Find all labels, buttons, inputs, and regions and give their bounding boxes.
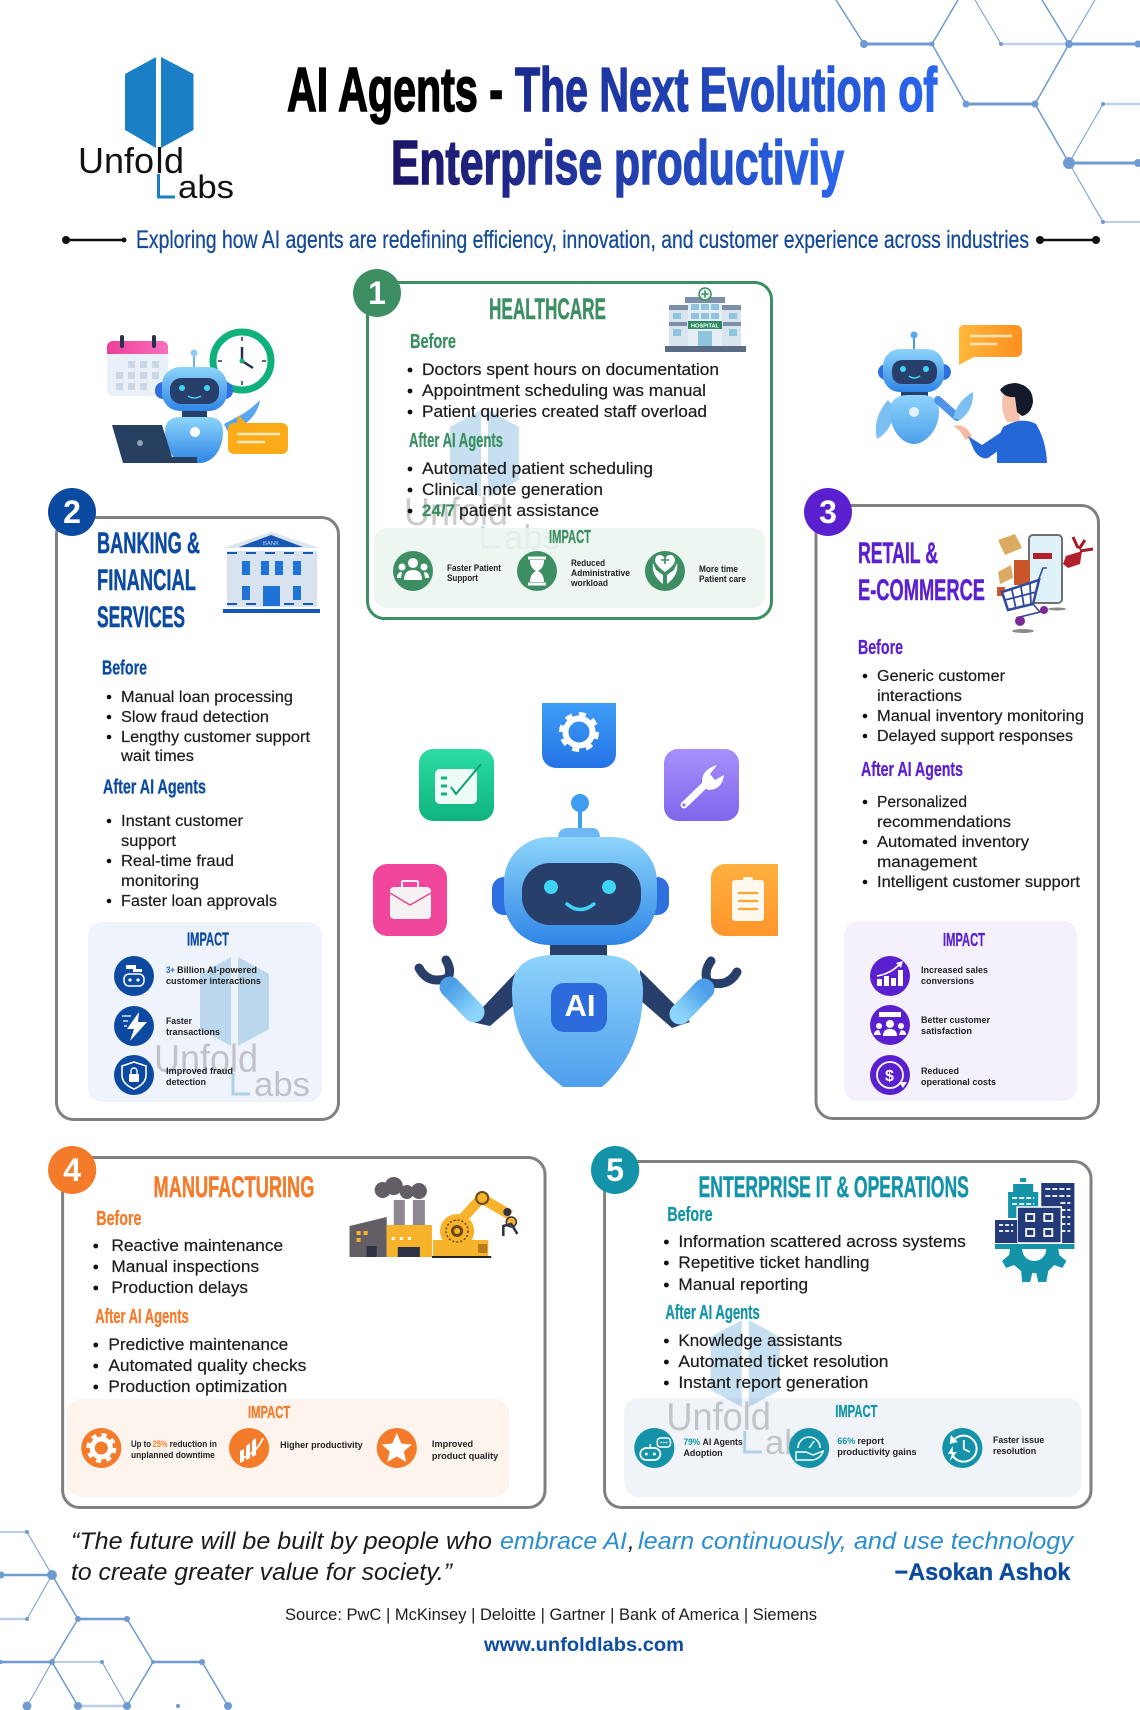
hexagon network decoration: bottom left bbox=[0, 1530, 232, 1710]
icon: orange gear bbox=[81, 1428, 121, 1468]
icon: buildings on gear bbox=[995, 1178, 1074, 1282]
impact text: billion interactions: Billion AI-powered bbox=[177, 965, 257, 976]
after list: Automated inventory bbox=[877, 834, 1029, 851]
icon: bot chat bbox=[634, 1428, 674, 1468]
impact panel: enterprise: IMPACT bbox=[835, 1401, 877, 1421]
badge 3: 3 bbox=[819, 494, 837, 530]
watermark: healthcare: Unfold bbox=[404, 491, 508, 534]
heading: healthcare: HEALTHCARE bbox=[489, 293, 606, 326]
after heading: After AI Agents bbox=[665, 1301, 760, 1324]
badge 4 bbox=[48, 1146, 96, 1194]
badge 2 bbox=[48, 488, 96, 536]
watermark: banking bbox=[154, 957, 310, 1104]
before list: Generic customer bbox=[877, 668, 1005, 685]
before list: wait times bbox=[120, 748, 194, 765]
impact text: improved quality: product quality bbox=[432, 1451, 499, 1462]
after list bbox=[93, 1335, 306, 1396]
badge 3 bbox=[804, 488, 852, 536]
impact text: faster transactions bbox=[166, 1016, 220, 1038]
quote attribution: −Asokan Ashok bbox=[894, 1559, 1071, 1586]
impact text: adoption: AI Agents bbox=[703, 1437, 743, 1448]
impact text: faster transactions: Faster bbox=[166, 1016, 192, 1027]
after list: Automated patient scheduling bbox=[422, 459, 653, 478]
impact text: productivity gains: productivity gains bbox=[837, 1447, 917, 1458]
title: AI Agents - bbox=[287, 56, 503, 125]
watermark: banking: abs bbox=[254, 1066, 310, 1104]
after list: Intelligent customer support bbox=[877, 874, 1081, 891]
impact text: faster patient support bbox=[447, 563, 502, 584]
before list bbox=[107, 689, 311, 765]
logo: Unfold Labs: abs bbox=[178, 169, 234, 205]
after list: Automated ticket resolution bbox=[678, 1352, 888, 1371]
after list: Automated quality checks bbox=[108, 1356, 306, 1375]
impact text: improved fraud detection bbox=[166, 1066, 233, 1088]
icon: satisfied customers bbox=[870, 1005, 910, 1045]
impact text: faster resolution: resolution bbox=[993, 1446, 1036, 1457]
heading: retail: RETAIL & bbox=[858, 537, 938, 570]
icon: shopping cart and phone bbox=[997, 534, 1093, 633]
panel: 1 healthcare bbox=[353, 269, 772, 618]
impact text: operational costs: operational costs bbox=[921, 1077, 996, 1088]
icon: hospital: HOSPITAL bbox=[691, 324, 720, 330]
icon: people bbox=[393, 551, 433, 591]
impact text: faster resolution bbox=[993, 1435, 1045, 1457]
title bbox=[287, 56, 937, 198]
before heading: Before bbox=[410, 330, 456, 353]
before list: Doctors spent hours on documentation bbox=[422, 360, 719, 379]
badge 5 bbox=[591, 1146, 639, 1194]
impact text: adoption: Adoption bbox=[683, 1448, 723, 1459]
impact text: productivity gains: report bbox=[857, 1436, 885, 1447]
icon: bank: BANK bbox=[263, 541, 279, 547]
impact panel: retail bbox=[844, 921, 1077, 1101]
impact text: more patient time bbox=[699, 564, 746, 585]
badge 5: 5 bbox=[606, 1152, 624, 1188]
icon: hourglass bbox=[517, 551, 557, 591]
after list: Personalized bbox=[877, 794, 967, 811]
title: The Next Evolution of bbox=[515, 56, 937, 125]
badge 1: 1 bbox=[368, 275, 386, 311]
logo: Unfold Labs: l bbox=[156, 140, 164, 181]
impact text: billion interactions bbox=[166, 965, 261, 987]
after list bbox=[107, 813, 277, 910]
after list bbox=[863, 794, 1081, 891]
impact text: reduced downtime bbox=[131, 1439, 217, 1461]
impact text: higher productivity: Higher productivity bbox=[280, 1440, 363, 1451]
before list: Patient queries created staff overload bbox=[422, 402, 707, 421]
impact panel: enterprise bbox=[624, 1398, 1081, 1497]
watermark: healthcare bbox=[404, 410, 560, 557]
icon: shield lock bbox=[114, 1055, 154, 1095]
before list bbox=[408, 360, 719, 421]
before list: Manual reporting bbox=[678, 1275, 808, 1294]
icon: lightning bbox=[114, 1006, 154, 1046]
watermark: enterprise: abs bbox=[765, 1424, 821, 1462]
after list: Real-time fraud bbox=[121, 853, 234, 870]
impact text: reduced downtime: reduction in bbox=[170, 1439, 217, 1450]
panel: 2 banking and financial services bbox=[48, 488, 338, 1120]
impact text: reduced workload bbox=[570, 558, 630, 589]
after heading: After AI Agents bbox=[103, 776, 206, 798]
icon: hospital bbox=[665, 288, 746, 352]
impact text: customer satisfaction bbox=[921, 1015, 990, 1037]
impact text: reduced workload: workload bbox=[570, 578, 608, 589]
badge 2: 2 bbox=[63, 494, 81, 530]
impact panel: healthcare: IMPACT bbox=[549, 527, 591, 547]
after list: patient assistance bbox=[459, 501, 599, 520]
before list: Manual inspections bbox=[111, 1257, 259, 1276]
icon: reduced cost: $ bbox=[885, 1068, 894, 1085]
before list: Repetitive ticket handling bbox=[678, 1253, 869, 1272]
after list: monitoring bbox=[121, 873, 199, 890]
after list: support bbox=[121, 833, 177, 850]
quote: embrace AI bbox=[500, 1528, 627, 1555]
icon tile: gear bbox=[542, 703, 616, 768]
icon tile: wrench bbox=[664, 749, 739, 821]
before list: Delayed support responses bbox=[877, 728, 1073, 745]
before heading: Before bbox=[102, 656, 147, 680]
icon: star bbox=[377, 1428, 417, 1468]
icon: fast history clock bbox=[942, 1428, 982, 1468]
impact text: operational costs: Reduced bbox=[921, 1066, 959, 1077]
robot body with AI badge bbox=[512, 945, 643, 1087]
impact panel: manufacturing bbox=[67, 1399, 509, 1497]
robot head bbox=[492, 794, 669, 945]
after list: Instant customer bbox=[121, 813, 243, 830]
icon: reduced cost bbox=[870, 1055, 910, 1095]
quote: to create greater value for society.” bbox=[71, 1559, 453, 1586]
panel: 5 enterprise IT and operations bbox=[591, 1146, 1091, 1508]
icon: chatbot bbox=[114, 956, 154, 996]
hexagon network decoration: top right bbox=[836, 0, 1140, 224]
impact text: operational costs bbox=[921, 1066, 996, 1088]
before list: interactions bbox=[877, 688, 962, 705]
watermark: enterprise: Unfold bbox=[666, 1396, 771, 1439]
impact panel: manufacturing: IMPACT bbox=[248, 1402, 290, 1422]
before heading: Before bbox=[858, 636, 903, 659]
impact panel: banking bbox=[88, 922, 322, 1104]
icon tile: briefcase bbox=[373, 864, 447, 936]
after heading: After AI Agents bbox=[861, 758, 963, 781]
after list: Knowledge assistants bbox=[678, 1331, 842, 1350]
impact text: customer satisfaction: satisfaction bbox=[921, 1026, 972, 1037]
impact text: faster patient support: Support bbox=[447, 573, 479, 584]
before list: Manual loan processing bbox=[121, 689, 293, 706]
impact panel: healthcare bbox=[374, 527, 765, 608]
heading: banking: FINANCIAL bbox=[97, 564, 196, 597]
before heading: Before bbox=[96, 1207, 142, 1230]
impact text: sales conversions: Increased sales bbox=[921, 965, 988, 976]
after list bbox=[408, 459, 653, 520]
before heading: Before bbox=[667, 1203, 713, 1226]
title: Enterprise productiviy bbox=[391, 129, 844, 198]
impact text: improved quality: Improved bbox=[432, 1439, 473, 1450]
impact text: reduced workload: Administrative bbox=[571, 568, 630, 579]
impact text: billion interactions: 3+ bbox=[166, 965, 175, 976]
heading: banking: SERVICES bbox=[97, 601, 185, 634]
source line: Source: PwC | McKinsey | Deloitte | Gartner | Bank of America | Siemens bbox=[285, 1606, 817, 1624]
after list: Predictive maintenance bbox=[108, 1335, 288, 1354]
robot body with AI badge: AI bbox=[564, 988, 596, 1023]
heading: retail bbox=[858, 537, 985, 607]
icon tile: checklist bbox=[419, 749, 494, 821]
website: www.unfoldlabs.com bbox=[483, 1634, 684, 1656]
impact text: reduced downtime: Up to bbox=[131, 1439, 151, 1450]
impact text: reduced downtime: 25% bbox=[153, 1439, 168, 1450]
before list: Slow fraud detection bbox=[121, 709, 269, 726]
heading: retail: E-COMMERCE bbox=[858, 574, 985, 607]
impact panel: banking: IMPACT bbox=[187, 930, 229, 950]
panel: 4 manufacturing bbox=[48, 1146, 545, 1508]
central illustration: AI robot with floating tool tiles bbox=[373, 703, 778, 1087]
quote: , bbox=[628, 1528, 635, 1555]
heading: banking: BANKING & bbox=[97, 527, 200, 560]
impact text: customer satisfaction: Better customer bbox=[921, 1015, 990, 1026]
robot arms bbox=[419, 960, 737, 1028]
quote: “The future will be built by people who bbox=[71, 1528, 492, 1555]
watermark: enterprise bbox=[666, 1320, 821, 1462]
heading: banking bbox=[97, 527, 200, 634]
before list bbox=[93, 1236, 283, 1297]
before list: Manual inventory monitoring bbox=[877, 708, 1084, 725]
impact text: faster patient support: Faster Patient bbox=[447, 563, 502, 574]
icon: gauge in hand bbox=[789, 1428, 829, 1468]
before list bbox=[664, 1232, 966, 1294]
watermark: banking: Unfold bbox=[154, 1038, 258, 1081]
quote: learn continuously, and use technology bbox=[638, 1528, 1075, 1555]
before list: Production delays bbox=[111, 1278, 248, 1297]
watermark: healthcare: abs bbox=[504, 519, 560, 557]
impact text: improved fraud detection: detection bbox=[166, 1077, 206, 1088]
after list: recommendations bbox=[877, 814, 1011, 831]
after heading: After AI Agents bbox=[95, 1305, 189, 1328]
impact text: more patient time: More time bbox=[699, 564, 738, 575]
badge 4: 4 bbox=[63, 1152, 81, 1188]
logo: Unfold Labs: Unfo bbox=[78, 140, 154, 181]
after list: Faster loan approvals bbox=[121, 893, 277, 910]
after heading: After AI Agents bbox=[409, 429, 503, 452]
impact text: productivity gains: 66% bbox=[837, 1436, 856, 1447]
impact text: reduced downtime: unplanned downtime bbox=[131, 1450, 215, 1461]
icon: caring hands bbox=[645, 551, 685, 591]
after list: Clinical note generation bbox=[422, 480, 603, 499]
before list: Appointment scheduling was manual bbox=[422, 381, 706, 400]
after list bbox=[664, 1331, 888, 1392]
impact text: adoption bbox=[683, 1437, 743, 1459]
quote bbox=[71, 1528, 1075, 1586]
impact text: faster resolution: Faster issue bbox=[993, 1435, 1045, 1446]
logo: Unfold Labs: d bbox=[164, 140, 184, 181]
before list: Information scattered across systems bbox=[678, 1232, 966, 1251]
icon: rising bars bbox=[229, 1428, 269, 1468]
impact text: reduced workload: Reduced bbox=[571, 558, 605, 569]
before list: Reactive maintenance bbox=[111, 1236, 283, 1255]
impact panel: retail: IMPACT bbox=[943, 930, 985, 950]
impact icons and text: enterprise bbox=[634, 1428, 1045, 1468]
after list: management bbox=[877, 854, 978, 871]
logo: Unfold Labs bbox=[78, 57, 234, 205]
before list: Lengthy customer support bbox=[121, 729, 311, 746]
impact text: improved fraud detection: Improved fraud bbox=[166, 1066, 233, 1077]
heading: manufacturing: MANUFACTURING bbox=[154, 1171, 314, 1204]
badge 1 bbox=[353, 269, 401, 317]
after list: Instant report generation bbox=[678, 1373, 868, 1392]
impact text: billion interactions: customer interactions bbox=[166, 976, 261, 987]
icon tile: clipboard bbox=[711, 864, 778, 936]
after list: Production optimization bbox=[108, 1377, 287, 1396]
impact text: faster transactions: transactions bbox=[166, 1027, 220, 1038]
icon: bank bbox=[223, 532, 320, 613]
illustration: robot with calendar, clock, laptop and chat bubble bbox=[107, 332, 288, 463]
impact text: sales conversions bbox=[921, 965, 988, 987]
impact text: adoption: 79% bbox=[683, 1437, 700, 1448]
impact text: improved quality bbox=[432, 1439, 499, 1462]
panel: 3 retail and e-commerce bbox=[804, 488, 1098, 1118]
icon: factory and robot arm bbox=[350, 1177, 517, 1258]
impact text: sales conversions: conversions bbox=[921, 976, 974, 987]
icon: growth chart bbox=[870, 956, 910, 996]
impact text: more patient time: Patient care bbox=[699, 574, 746, 585]
after list: 24/7 bbox=[422, 501, 455, 520]
before list bbox=[863, 668, 1084, 745]
illustration: robot talking with person bbox=[876, 325, 1047, 463]
impact text: productivity gains bbox=[837, 1436, 917, 1458]
